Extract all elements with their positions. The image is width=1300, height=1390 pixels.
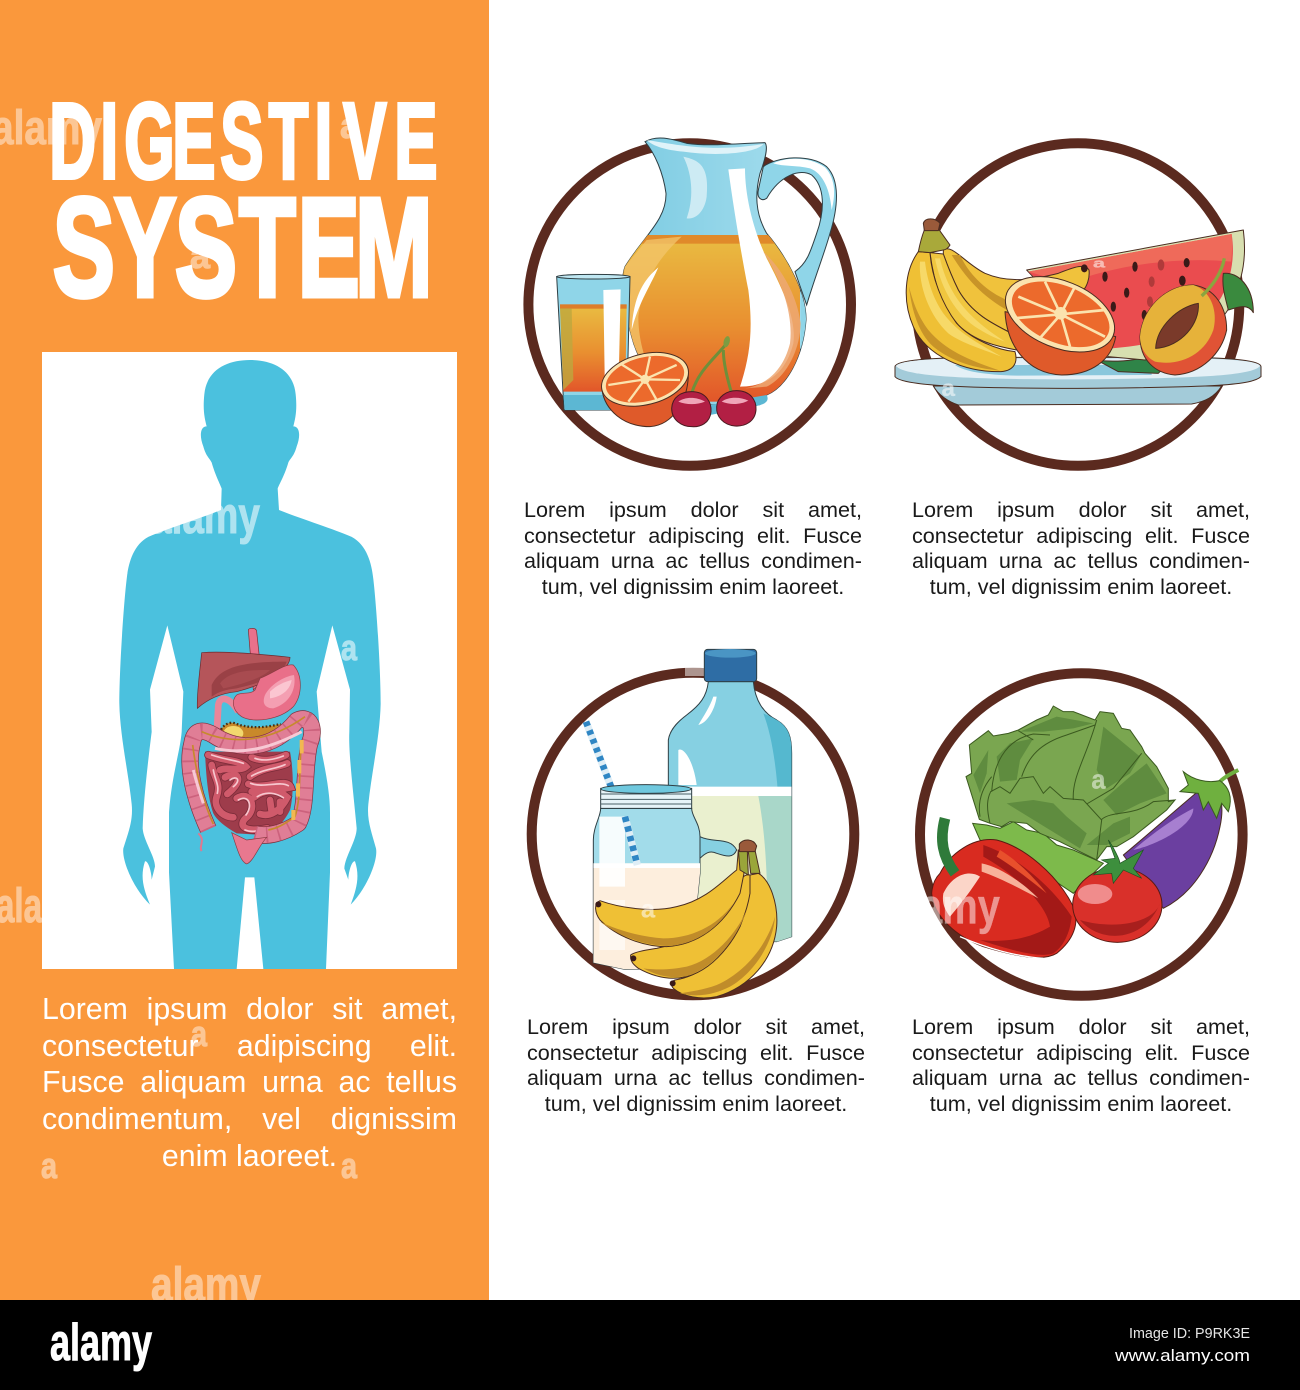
text block: sidebar description: enim laoreet. xyxy=(162,1140,337,1173)
icon: vegetables circle xyxy=(920,673,1243,996)
watermark marks xyxy=(942,255,1106,401)
watermark marks: a xyxy=(1093,255,1106,270)
text block: vegetable caption: consectetur adipiscing elit. Fusce xyxy=(912,1040,1250,1065)
title: digestive system xyxy=(49,80,437,327)
watermark on silhouette: a xyxy=(341,627,358,668)
watermelon xyxy=(1027,230,1245,373)
stomach xyxy=(233,665,300,720)
watermark: alamy fragments on orange: a xyxy=(341,1145,358,1186)
text block: juice caption: tum, vel dignissim enim laoreet. xyxy=(542,574,844,599)
eggplant xyxy=(1123,770,1238,908)
text block: fruit caption: Lorem ipsum dolor sit amet, xyxy=(912,497,1250,522)
watermark mark: a xyxy=(641,896,656,924)
footer bar xyxy=(0,1300,1300,1390)
watermark on silhouette: alamy xyxy=(150,487,260,545)
jug body xyxy=(623,138,806,405)
panel: orange sidebar xyxy=(0,0,489,1300)
large intestine xyxy=(190,717,312,835)
ring xyxy=(528,143,851,466)
text block: vegetable caption: tum, vel dignissim enim laoreet. xyxy=(930,1091,1232,1116)
text block: juice caption: aliquam urna ac tellus condimen- xyxy=(524,548,862,573)
jar xyxy=(586,722,702,970)
peach xyxy=(1140,258,1253,375)
text block: fruit caption: consectetur adipiscing elit. Fusce xyxy=(912,523,1250,548)
esophagus xyxy=(248,628,263,690)
human silhouette xyxy=(119,360,381,969)
panel: body illustration xyxy=(42,352,457,969)
text block: juice caption: Lorem ipsum dolor sit amet, xyxy=(524,497,862,522)
ring xyxy=(920,673,1243,996)
text block: sidebar description: Fusce aliquam urna ac tellus xyxy=(42,1066,457,1099)
watermark: alamy fragments on orange: a xyxy=(41,1145,58,1186)
text block: sidebar description: Lorem ipsum dolor sit amet, xyxy=(42,993,457,1026)
small intestine xyxy=(205,752,293,835)
text block: sidebar description: consectetur adipiscing elit. xyxy=(42,1030,457,1063)
text block: vegetable caption: aliquam urna ac tellus condimen- xyxy=(912,1065,1250,1090)
bell pepper xyxy=(932,818,1076,958)
alamy logo: alamy xyxy=(50,1314,152,1372)
title: digestive system: DIGESTIVE xyxy=(49,80,437,201)
site url: www.alamy.com xyxy=(1114,1346,1250,1365)
watermark marks xyxy=(920,764,1105,934)
tomato xyxy=(1073,840,1162,942)
watermark marks: a xyxy=(942,375,956,401)
plate xyxy=(895,357,1261,405)
text block: vegetable caption xyxy=(912,1014,1250,1116)
bananas xyxy=(906,219,1089,372)
text block: sidebar description: condimentum, vel dignissim xyxy=(42,1103,457,1136)
watermark marks: amy xyxy=(920,878,1000,934)
appendix xyxy=(198,833,202,851)
text block: fruit caption: tum, vel dignissim enim laoreet. xyxy=(930,574,1232,599)
watermark marks: a xyxy=(1091,764,1105,794)
title: digestive system: SYSTEM xyxy=(53,170,433,327)
text block: vegetable caption: Lorem ipsum dolor sit amet, xyxy=(912,1014,1250,1039)
pancreas xyxy=(219,723,281,748)
text block: milk caption: aliquam urna ac tellus condimen- xyxy=(527,1065,865,1090)
duodenum xyxy=(217,699,238,735)
bottle xyxy=(667,649,793,943)
watermark: alamy fragments on orange: a xyxy=(340,105,361,146)
glass xyxy=(557,274,630,410)
watermark on silhouette xyxy=(150,487,358,668)
text block: milk caption xyxy=(527,1014,865,1116)
straw xyxy=(586,722,637,865)
jar handle xyxy=(700,837,737,858)
watermark patch on ring xyxy=(685,667,704,676)
image id: Image ID: P9RK3E xyxy=(1129,1325,1250,1342)
bananas xyxy=(595,840,777,998)
text block: juice caption xyxy=(524,497,862,599)
text block: milk caption: tum, vel dignissim enim laoreet. xyxy=(545,1091,847,1116)
icon: fruit plate circle xyxy=(895,143,1261,466)
text block: milk caption: consectetur adipiscing elit. Fusce xyxy=(527,1040,865,1065)
ring xyxy=(532,673,854,995)
text block: sidebar description xyxy=(42,993,457,1173)
lettuce xyxy=(966,706,1175,893)
watermark: alamy fragments on orange xyxy=(0,102,361,1312)
ring xyxy=(917,143,1239,466)
jug juice xyxy=(620,140,811,402)
icon: juice circle xyxy=(528,138,851,466)
text block: juice caption: consectetur adipiscing elit. Fusce xyxy=(524,523,862,548)
watermark: alamy fragments on orange: a xyxy=(191,1013,208,1054)
rectum xyxy=(232,833,267,864)
watermark: alamy fragments on orange: a xyxy=(190,235,211,276)
digestive organs xyxy=(190,628,312,864)
text block: milk caption: Lorem ipsum dolor sit amet, xyxy=(527,1014,865,1039)
watermark: alamy fragments on orange: alamy xyxy=(151,1259,261,1312)
icon: milk and banana circle xyxy=(532,649,854,998)
jug handle xyxy=(758,158,836,305)
orange half xyxy=(596,344,694,427)
cherries xyxy=(672,335,756,427)
text block: fruit caption xyxy=(912,497,1250,599)
orange xyxy=(994,262,1126,375)
jug base xyxy=(710,395,768,415)
text block: fruit caption: aliquam urna ac tellus condimen- xyxy=(912,548,1250,573)
liver xyxy=(197,652,290,708)
